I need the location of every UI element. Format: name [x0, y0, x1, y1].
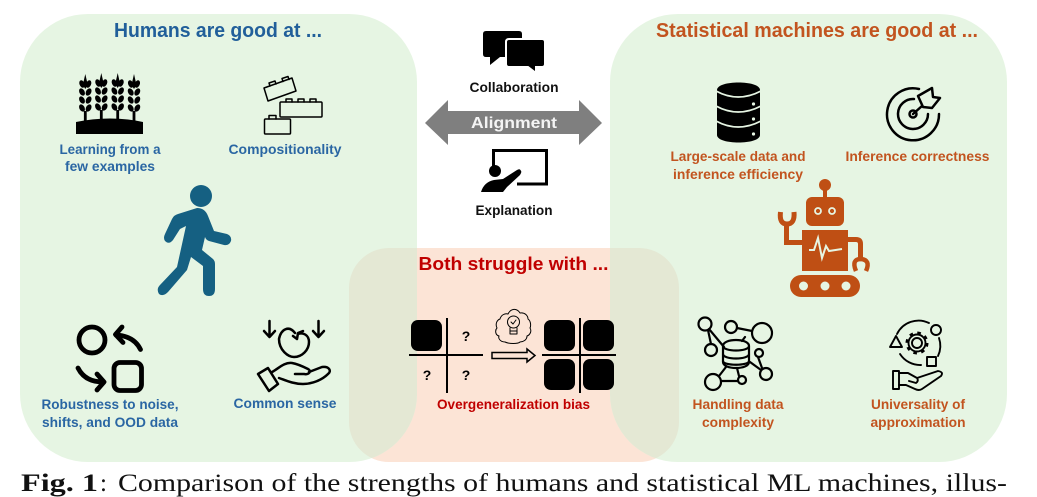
text: compositionality: Compositionality	[228, 142, 342, 157]
text: handling data complexity: Handling data	[692, 397, 784, 412]
icon: robustness shapes and arrows	[78, 327, 142, 390]
icon: building bricks	[264, 76, 322, 134]
text: learning from a few examples: few examples	[65, 159, 155, 174]
panel: humans are good at	[20, 14, 417, 462]
heading: humans: Humans are good at ...	[114, 20, 322, 42]
icon: universal approximation	[890, 321, 942, 390]
icon: person at presentation board	[481, 150, 546, 192]
text: overgeneralization bias: Overgeneralization bias	[437, 397, 590, 412]
text: handling data complexity	[692, 397, 784, 430]
icon: database	[716, 82, 761, 142]
icon: generalization arrow	[492, 349, 535, 362]
overlap: machines and both struggle	[610, 248, 679, 458]
text: robustness	[42, 397, 178, 430]
icon: target with dart	[887, 88, 940, 140]
caption: Fig. 1	[21, 470, 98, 497]
text: robustness: Robustness to noise,	[42, 397, 178, 412]
text: large-scale data: inference efficiency	[673, 167, 803, 182]
icon: data network	[698, 318, 772, 390]
caption: Comparison of the strengths of humans and statistical ML machines, illus-	[118, 470, 1007, 497]
text: learning from a few examples	[60, 142, 161, 174]
overlap: humans and both struggle	[349, 248, 417, 458]
text: handling data complexity: complexity	[702, 415, 774, 430]
panel: statistical machines are good at	[610, 14, 1007, 462]
text: learning from a few examples: Learning from a	[60, 142, 161, 157]
text: universality of approximation: approximation	[870, 415, 966, 430]
text: common sense: Common sense	[234, 396, 337, 411]
text: large-scale data: Large-scale data and	[670, 149, 806, 164]
arrow: alignment double arrow	[425, 100, 602, 145]
icon: partial quadrant grid: ?	[462, 367, 470, 383]
icon: apple falling onto hand	[258, 321, 330, 391]
heading: both struggle: Both struggle with ...	[418, 254, 608, 274]
text: inference correctness: Inference correctness	[846, 149, 990, 164]
caption: :	[100, 470, 107, 497]
icon: speech bubbles	[483, 31, 545, 73]
text: universality of approximation: Universality of	[871, 397, 966, 412]
icon: partial quadrant grid: ?	[423, 367, 431, 383]
icon: brain with lightbulb	[496, 309, 531, 344]
text: large-scale data	[670, 149, 806, 182]
panel: both struggle background	[349, 248, 679, 462]
icon: partial quadrant grid: ?	[462, 328, 470, 344]
text: explanation: Explanation	[476, 203, 552, 218]
text: universality of approximation	[870, 397, 966, 430]
icon: filled quadrant grid	[542, 318, 616, 393]
icon: robot	[780, 179, 868, 297]
icon: wheat field	[76, 73, 143, 134]
icon: walking person	[158, 185, 231, 296]
text: collaboration: Collaboration	[470, 80, 558, 95]
heading: statistical machines: Statistical machines are good at ...	[656, 20, 978, 42]
icon: partial quadrant grid	[409, 318, 483, 393]
text: alignment: Alignment	[471, 115, 558, 132]
text: robustness: shifts, and OOD data	[42, 415, 178, 430]
